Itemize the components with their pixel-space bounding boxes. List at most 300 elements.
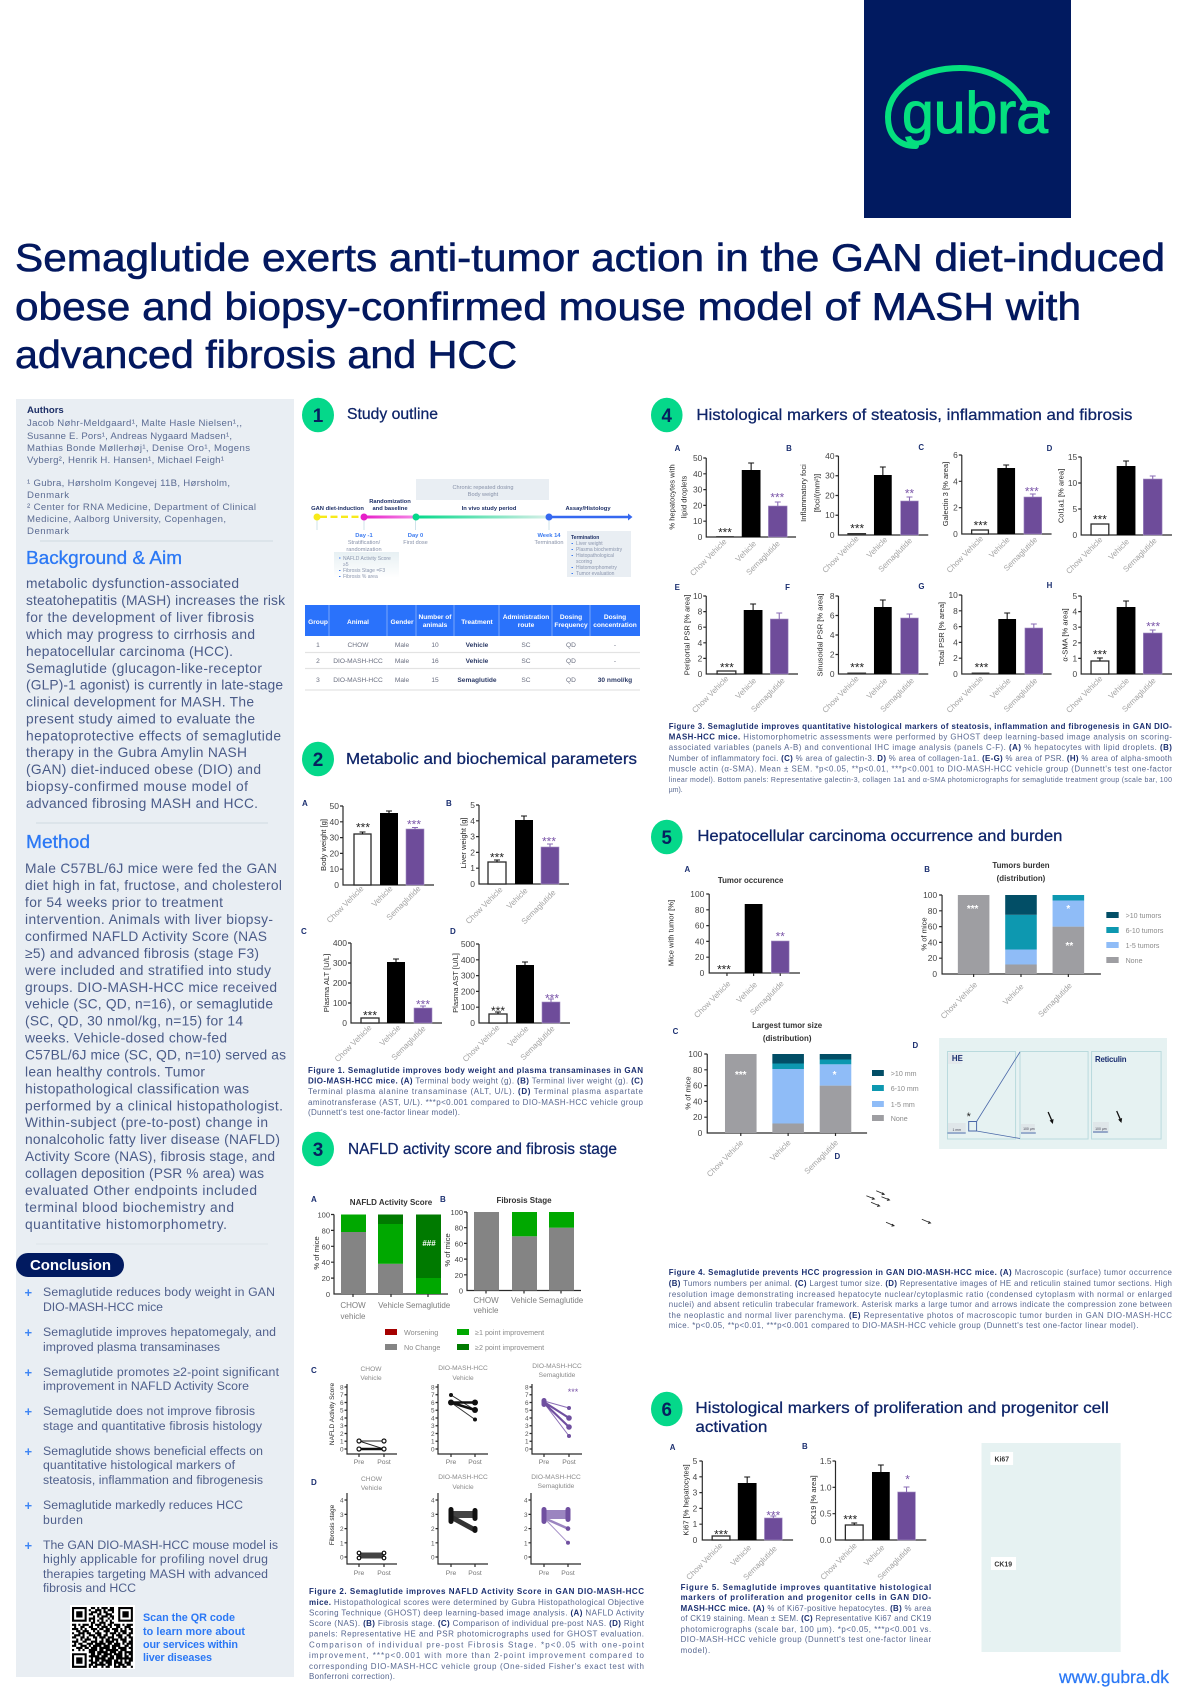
study table: Administration (503, 614, 549, 621)
image panel: HE and reticulin: * (967, 1111, 972, 1123)
bar chart: Ki67: A (670, 1443, 676, 1452)
bar chart: Ki67: 0 (693, 1535, 698, 1545)
bar chart: CK19: * (905, 1472, 910, 1487)
bar chart: CK19: Vehicle (862, 1543, 887, 1568)
line chart: NAS semaglutide: Post (562, 1459, 576, 1466)
timeline: Tumor evaluation (576, 571, 615, 577)
image panel: HE and reticulin: HE (952, 1054, 963, 1063)
line chart: fibrosis semaglutide: 4 (524, 1498, 528, 1504)
bar chart: plasma ALT: Semaglutide (390, 1024, 428, 1062)
study table: 10 (431, 642, 439, 649)
line chart: NAS chow vehicle: 6 (340, 1400, 344, 1407)
line chart: NAS semaglutide: 8 (525, 1384, 529, 1392)
bar chart: CK19: 0.0 (820, 1535, 832, 1545)
stacked bars: NAFLD activity score: 60 (322, 1242, 330, 1251)
bar chart: plasma AST: 0 (470, 1018, 475, 1028)
badge 5 (651, 820, 683, 854)
bar chart: sinusoidal PSR (785, 583, 928, 715)
line chart: fibrosis chow vehicle: 4 (340, 1498, 344, 1504)
stacked bars: NAFLD activity score: Vehicle (378, 1301, 404, 1310)
bar chart: plasma AST: 500 (461, 939, 475, 949)
stacked bars: fibrosis stage: vehicle (474, 1306, 499, 1315)
bar chart: tumor occurrence: 20 (695, 952, 705, 962)
conclusion bullets: + (24, 1285, 32, 1300)
QR caption (143, 1612, 245, 1664)
text block: background (25, 576, 285, 811)
image panel: HE and reticulin: 100 µm (1023, 1127, 1035, 1131)
bar chart: Col1a1: *** (1093, 512, 1107, 527)
study table: Frequency (554, 622, 588, 629)
bar chart: total PSR: Semaglutide (1002, 676, 1040, 714)
line chart: fibrosis DIO-MASH-HCC vehicle: Vehicle (452, 1484, 474, 1491)
caption: figure 5 (681, 1583, 932, 1655)
legend: NAS change: ≥2 point improvement (475, 1343, 544, 1352)
bar chart: body weight: *** (356, 820, 370, 834)
bar chart: periportal PSR: E (675, 583, 680, 592)
bar chart: alpha-SMA: H (1047, 581, 1053, 590)
bar chart: alpha-SMA: 2 (1073, 638, 1078, 648)
text block: method: (SC, QD, 30 nmol/kg, n=15) for 14 (25, 1014, 243, 1028)
timeline: scoring (576, 559, 592, 565)
conclusion bullets: + (24, 1444, 32, 1459)
image panel: HE and reticulin: 1 mm (953, 1128, 961, 1132)
image panel: HE and reticulin (912, 1038, 1167, 1149)
line chart: fibrosis DIO-MASH-HCC vehicle: 3 (431, 1512, 435, 1519)
authors: Medicine, Aalborg University, Copenhagen, (27, 514, 226, 525)
stacked bars: fibrosis stage: % of mice (443, 1233, 452, 1267)
heading: NAFLD: NAFLD activity score and fibrosis stage (348, 1141, 617, 1158)
stacked bars: NAFLD activity score: ### (422, 1239, 436, 1248)
conclusion bullets: burden (43, 1513, 83, 1527)
bar chart: liver weight: 0 (470, 879, 475, 889)
heading: method: Method (26, 832, 90, 852)
text block: method: performed by a clinical histopathologist. (25, 1098, 283, 1113)
bar chart: alpha-SMA: 5 (1073, 591, 1078, 601)
line chart: NAS DIO-MASH-HCC vehicle: 5 (431, 1408, 435, 1415)
bar chart: galectin 3: 0 (953, 529, 958, 539)
bar chart: inflammatory foci: 30 (825, 471, 835, 481)
QR caption: Scan the QR code (143, 1612, 235, 1624)
bar chart: body weight: 10 (330, 864, 339, 874)
study table: SC (521, 677, 531, 684)
conclusion bullets: therapies targeting MASH with advanced (43, 1567, 268, 1581)
study table: Male (395, 658, 409, 665)
caption: figure 4: resolution image demonstrating increased hepatocyte nuclear/cytoplasmic ratio (condensed cytoplasm with normal or enlarged (669, 1290, 1172, 1299)
legend: tumors: 1-5 tumors (1126, 942, 1160, 950)
bar chart: plasma ALT: 200 (333, 978, 347, 988)
badge 1: 1 (313, 406, 324, 427)
bar chart: total PSR (918, 582, 1052, 715)
bar chart: tumor occurrence: Mice with tumor [%] (667, 900, 676, 966)
line chart: NAS semaglutide: 5 (525, 1408, 529, 1415)
conclusion bullets: highly applicable for profiling novel drug (43, 1552, 268, 1566)
line chart: NAS DIO-MASH-HCC vehicle: 4 (431, 1416, 435, 1422)
bar chart: plasma ALT: 400 (333, 938, 347, 948)
authors: Denmark (27, 526, 69, 537)
image panel: Ki67 and CK19: CK19 (994, 1561, 1012, 1569)
line chart: fibrosis semaglutide: DIO-MASH-HCC (531, 1474, 581, 1481)
text block: method: Within-subject (pre-to-post) change in (25, 1115, 268, 1130)
bar chart: hepatocytes with lipid droplets: *** (718, 525, 732, 540)
bar chart: body weight: Vehicle (370, 884, 395, 909)
line chart: fibrosis chow vehicle: Pre (354, 1570, 365, 1577)
line chart: fibrosis chow vehicle: Fibrosis stage (329, 1504, 336, 1545)
conclusion bullets: + (24, 1404, 32, 1419)
bar chart: liver weight: B (446, 799, 452, 808)
bar chart: total PSR: G (918, 582, 925, 591)
timeline: Termination (571, 535, 599, 541)
legend: NAS change: No Change (404, 1343, 440, 1352)
bar chart: tumor occurrence (667, 865, 800, 1020)
line chart: fibrosis chow vehicle: 2 (340, 1526, 344, 1533)
timeline: Liver weight (576, 541, 603, 547)
legend: tumor size: 6-10 mm (891, 1085, 919, 1093)
caption: figure 5: Figure 5. Semaglutide improves quantitative histological (681, 1583, 931, 1592)
legend: tumor size: >10 mm (891, 1070, 917, 1078)
text block: method: ≥5) and advanced fibrosis (stage F3) (25, 946, 259, 961)
bar chart: plasma AST: 200 (461, 986, 475, 996)
stacked bars: largest tumor size: 40 (693, 1096, 703, 1106)
bar chart: sinusoidal PSR: Semaglutide (879, 676, 916, 714)
caption: figure 5: of CK19 staining. Mean ± SEM. (C) Representative Ki67 and CK19 (681, 1614, 932, 1623)
caption: figure 4: Figure 4. Semaglutide prevents HCC progression in GAN DIO-MASH-HCC mice. (A) Macroscopic (surface) tumor occurrence (669, 1268, 1173, 1277)
bar chart: body weight: 30 (330, 833, 339, 843)
study table: Dosing (604, 614, 626, 621)
study table: concentration (593, 622, 637, 629)
stacked bars: largest tumor size: (distribution) (763, 1034, 812, 1043)
bar chart: alpha-SMA: 3 (1073, 622, 1078, 632)
line chart: NAS DIO-MASH-HCC vehicle: 6 (431, 1400, 435, 1407)
caption: figure 3: linear model). Bottom panels: Representative galectin-3, collagen 1a1 and α-SMA photomicrographs for semaglutide treatment group (scale bar, 100 (669, 777, 1172, 784)
logo: gubra: gubra (902, 81, 1049, 146)
bar chart: liver weight: 2 (470, 847, 475, 857)
bar chart: Ki67 (670, 1443, 793, 1582)
bar chart: total PSR: 10 (949, 590, 958, 600)
conclusion bullets: Semaglutide markedly reduces HCC (43, 1498, 243, 1512)
bar chart: total PSR: Total PSR [% area] (937, 602, 946, 666)
bar chart: body weight (302, 799, 434, 925)
bar chart: total PSR: Vehicle (988, 676, 1013, 701)
bar chart: hepatocytes with lipid droplets: % hepatocytes with (668, 464, 677, 530)
panel: sidebar (16, 399, 294, 1677)
heading: proliferation: Histological markers of proliferation and progenitor cell (695, 1400, 1109, 1417)
bar chart: inflammatory foci: 40 (825, 451, 835, 461)
study table: DIO-MASH-HCC (333, 658, 383, 665)
bar chart: body weight: Body weight [g] (319, 819, 328, 871)
text block: background: Semaglutide (glucagon-like-receptor (26, 661, 262, 676)
study table: 16 (431, 658, 439, 665)
bar chart: plasma AST: D (450, 927, 456, 936)
heading: proliferation (695, 1400, 1109, 1436)
bar chart: body weight: *** (407, 818, 421, 832)
line chart: NAS DIO-MASH-HCC vehicle: 2 (431, 1431, 435, 1438)
study table: animals (423, 622, 448, 629)
conclusion bullets: improved plasma transaminases (43, 1340, 220, 1354)
line chart: fibrosis chow vehicle (311, 1476, 397, 1577)
bar chart: total PSR: 8 (953, 606, 958, 616)
stacked bars: tumors burden: *** (967, 904, 979, 915)
bar chart: hepatocytes with lipid droplets: 40 (693, 469, 703, 479)
title (15, 237, 1165, 377)
line chart: fibrosis semaglutide: 3 (524, 1512, 528, 1519)
stacked bars: tumors burden: 0 (932, 969, 937, 979)
study table: 3 (316, 677, 320, 684)
bar chart: Ki67: *** (766, 1508, 781, 1523)
line chart: NAS chow vehicle: Vehicle (360, 1375, 382, 1382)
legend: NAS change (385, 1328, 544, 1352)
timeline: First dose (403, 540, 428, 546)
line chart: NAS semaglutide: Semaglutide (539, 1372, 576, 1379)
stacked bars: NAFLD activity score: 80 (322, 1226, 330, 1235)
legend: NAS change: Worsening (404, 1328, 438, 1337)
bar chart: plasma AST: Chow Vehicle (461, 1023, 502, 1064)
line chart: NAS DIO-MASH-HCC vehicle: DIO-MASH-HCC (438, 1365, 488, 1372)
line chart: NAS semaglutide: *** (568, 1387, 579, 1397)
panel: 1 study outline (302, 398, 640, 690)
bar chart: periportal PSR: Chow Vehicle (690, 674, 731, 715)
bar chart: sinusoidal PSR: Vehicle (865, 676, 890, 701)
heading: study outline: Study outline (347, 406, 438, 423)
conclusion bullets: + (24, 1498, 32, 1513)
stacked bars: NAFLD activity score: 0 (326, 1290, 330, 1299)
title: obese and biopsy-confirmed mouse model of MASH with (15, 286, 1081, 329)
line chart: fibrosis semaglutide: 1 (524, 1540, 528, 1547)
bar chart: CK19 (802, 1442, 926, 1582)
caption: figure 2: Figure 2. Semaglutide improves NAFLD Activity Score in GAN DIO-MASH-HCC (309, 1587, 644, 1596)
legend: tumors: None (1126, 957, 1143, 965)
stacked bars: tumors burden: % of mice (919, 917, 928, 951)
caption: figure 2: corresponding DIO-MASH-HCC vehicle group (One-sided Fisher's exact test with (309, 1662, 644, 1671)
text block: method: diet high in fat, fructose, and cholesterol (25, 878, 282, 893)
bar chart: inflammatory foci (786, 444, 928, 575)
caption: figure 1: Terminal plasma alanine transaminase (ALT, U/L). (D) Terminal plasma aspartate (308, 1087, 644, 1096)
bar chart: Ki67: 5 (693, 1456, 698, 1466)
line chart: NAS chow vehicle: 4 (340, 1416, 344, 1422)
title: Semaglutide exerts anti-tumor action in the GAN diet-induced (15, 237, 1165, 280)
line chart: NAS semaglutide: 6 (525, 1400, 529, 1407)
timeline: and baseline (372, 506, 408, 512)
line chart: fibrosis chow vehicle: CHOW (361, 1476, 383, 1483)
stacked bars: tumors burden: (distribution) (997, 874, 1046, 883)
line chart: NAS DIO-MASH-HCC vehicle (431, 1365, 488, 1466)
bar chart: alpha-SMA: Chow Vehicle (1064, 674, 1105, 715)
bar chart: inflammatory foci: [foci/(mm²)] (813, 474, 822, 512)
caption: figure 2: mice. Histopathological scores were determined by Gubra Histopathological Objective (309, 1598, 645, 1607)
panel: 5 hepatocellular carcinoma (651, 820, 1173, 1330)
authors: ¹ Gubra, Hørsholm Kongevej 11B, Hørsholm, (27, 478, 230, 489)
caption: figure 5: DIO-MASH-HCC vehicle group (Dunnett's test one-factor linear (681, 1635, 932, 1644)
text block: method: nonalcoholic fatty liver disease (NAFLD) (25, 1132, 280, 1147)
bar chart: Col1a1: Vehicle (1107, 537, 1131, 562)
text block: method: Activity Score (NAS), fibrosis stage, and (25, 1149, 275, 1164)
line chart: NAS semaglutide: DIO-MASH-HCC (532, 1363, 582, 1370)
text block: background: hepatocellular carcinoma (HCC). (26, 644, 233, 659)
line chart: NAS semaglutide: Pre (539, 1459, 550, 1466)
bar chart: plasma ALT: Chow Vehicle (333, 1023, 374, 1064)
bar chart: periportal PSR: 6 (698, 622, 703, 632)
heading: hepatocellular carcinoma: Hepatocellular carcinoma occurrence and burden (697, 828, 1062, 845)
legend: tumor size: None (891, 1115, 908, 1123)
image panel: HE and reticulin: D (912, 1041, 918, 1050)
stacked bars: fibrosis stage: Vehicle (511, 1296, 537, 1305)
stacked bars: largest tumor size: Semaglutide (803, 1138, 840, 1176)
text block: method (24, 861, 286, 1232)
bar chart: tumor occurrence: Semaglutide (748, 979, 786, 1017)
bar chart: CK19: CK19 [% area] (809, 1475, 818, 1525)
timeline: Day -1 (355, 533, 373, 539)
line chart: NAS chow vehicle: 5 (340, 1408, 344, 1415)
bar chart: periportal PSR: Semaglutide (749, 676, 787, 714)
legend: NAS change: ≥1 point improvement (475, 1328, 544, 1337)
panel: 3 NAFLD activity score and fibrosis stage (302, 1132, 645, 1681)
bar chart: Ki67: Semaglutide (741, 1544, 779, 1582)
study table: 15 (431, 677, 439, 684)
stacked bars: NAFLD activity score: 20 (322, 1274, 330, 1283)
bar chart: plasma AST: Semaglutide (519, 1024, 557, 1062)
line chart: fibrosis semaglutide: 0 (524, 1554, 528, 1562)
icon: small arrows (866, 1191, 931, 1226)
bar chart: tumor occurrence: 40 (695, 936, 705, 946)
text block: background: metabolic dysfunction-associated (26, 576, 239, 591)
heading: histological markers: Histological markers of steatosis, inflammation and fibrosis (696, 407, 1133, 424)
bar chart: tumor occurrence: Vehicle (735, 980, 759, 1005)
stacked bars: NAFLD activity score: Semaglutide (406, 1301, 451, 1310)
conclusion bullets: quantitative histological markers of (43, 1458, 236, 1472)
conclusion bullets: Semaglutide shows beneficial effects on (43, 1444, 263, 1458)
badge 3: 3 (313, 1140, 323, 1161)
bar chart: alpha-SMA: Vehicle (1107, 676, 1131, 701)
badge 5: 5 (662, 827, 672, 848)
stacked bars: tumors burden (919, 861, 1101, 1021)
bar chart: inflammatory foci: Semaglutide (877, 536, 914, 574)
study table: - (614, 658, 616, 665)
bar chart: CK19: Semaglutide (876, 1544, 913, 1582)
stacked bars: tumors burden: ** (1065, 941, 1073, 952)
caption: figure 1: DIO-MASH-HCC mice. (A) Terminal body weight (g). (B) Terminal liver weight (g). (C) (308, 1076, 643, 1086)
bar chart: Ki67: Vehicle (729, 1543, 754, 1568)
text block: method: terminal blood biochemistry and (25, 1200, 234, 1215)
bar chart: plasma AST: 300 (461, 971, 475, 981)
bar chart: hepatocytes with lipid droplets: 0 (698, 532, 703, 542)
study table: DIO-MASH-HCC (333, 677, 383, 684)
bar chart: Ki67: Ki67 [% hepatocytes] (682, 1464, 690, 1536)
line chart: NAS chow vehicle: 3 (340, 1423, 344, 1430)
bar chart: sinusoidal PSR: Chow Vehicle (821, 674, 861, 715)
line chart: NAS chow vehicle: 7 (340, 1392, 344, 1399)
text block: method: vehicle (SC, QD, n=16), or semaglutide (25, 997, 273, 1012)
text block: background: advanced fibrosing MASH and HCC. (26, 796, 258, 811)
bar chart: Ki67: 1 (693, 1519, 698, 1529)
bar chart: hepatocytes with lipid droplets: *** (770, 490, 785, 505)
text block: method: collagen deposition (PSR % area) was (25, 1166, 264, 1181)
stacked bars: fibrosis stage: 0 (459, 1286, 463, 1296)
bar chart: alpha-SMA: Semaglutide (1120, 676, 1158, 714)
timeline: Week 14 (537, 533, 561, 539)
bar chart: plasma AST: *** (491, 1004, 505, 1018)
bar chart: galectin 3: 4 (953, 476, 958, 486)
study table (305, 605, 640, 690)
bar chart: body weight: 40 (330, 817, 339, 827)
study table: Vehicle (466, 642, 489, 649)
line chart: fibrosis DIO-MASH-HCC vehicle: 0 (431, 1554, 435, 1562)
bar chart: hepatocytes with lipid droplets: Semaglutide (744, 539, 782, 577)
study table: Male (395, 677, 409, 684)
conclusion bullets: fibrosis and HCC (43, 1581, 136, 1595)
bar chart: Col1a1: Col1a1 [% area] (1056, 469, 1065, 523)
stacked bars: tumors burden: B (924, 865, 930, 874)
badge 1 (302, 398, 334, 432)
stacked bars: fibrosis stage: 100 (450, 1208, 463, 1217)
line chart: NAS chow vehicle (311, 1366, 397, 1466)
study table: 30 nmol/kg (598, 677, 632, 684)
timeline: Day 0 (408, 533, 423, 539)
line chart: fibrosis DIO-MASH-HCC vehicle: DIO-MASH-HCC (438, 1474, 488, 1481)
authors: Mathias Bonde Møllerhøj¹, Denise Oro¹, Mogens (27, 443, 250, 454)
bar chart: liver weight: 5 (470, 800, 475, 810)
stacked bars: tumors burden: 40 (928, 937, 937, 947)
bar chart: hepatocytes with lipid droplets: lipid droplets (680, 475, 688, 518)
authors: Jacob Nøhr-Meldgaard¹, Malte Hasle Nielsen¹,, (27, 418, 242, 429)
conclusion bullets: Semaglutide improves hepatomegaly, and (43, 1325, 276, 1339)
QR caption: liver diseases (143, 1652, 212, 1664)
line chart: NAS semaglutide (525, 1363, 582, 1466)
badge 2 (302, 742, 334, 776)
bar chart: alpha-SMA: α-SMA [% area] (1060, 608, 1069, 662)
bar chart: total PSR: 4 (953, 637, 958, 647)
caption: figure 1: Figure 1. Semaglutide improves body weight and plasma transaminases in GAN (308, 1066, 643, 1075)
study table: 1 (316, 642, 320, 649)
stacked bars: largest tumor size: Chow Vehicle (705, 1138, 746, 1179)
caption: figure 3: µm). (669, 787, 683, 794)
line chart: NAS chow vehicle: CHOW (361, 1366, 382, 1373)
line chart: fibrosis chow vehicle: 1 (340, 1540, 344, 1547)
stacked bars: largest tumor size: 20 (693, 1112, 703, 1122)
stacked bars: tumors burden: Semaglutide (1036, 981, 1074, 1019)
caption: figure 4: nuclei) and absent reticulin trabecular framework. Asterisk marks a large tumor and arrows indicate the compression zone between (669, 1300, 1172, 1309)
line chart: NAS DIO-MASH-HCC vehicle: Post (468, 1459, 482, 1466)
line chart: fibrosis DIO-MASH-HCC vehicle: 1 (431, 1540, 435, 1547)
line chart: fibrosis DIO-MASH-HCC vehicle: 4 (431, 1498, 435, 1504)
bar chart: CK19: 0.5 (820, 1509, 832, 1519)
bar chart: plasma ALT: Plasma ALT [U/L] (322, 954, 331, 1012)
bar chart: hepatocytes with lipid droplets: 30 (693, 485, 703, 495)
bar chart: tumor occurrence: 100 (690, 889, 705, 899)
stacked bars: fibrosis stage: Fibrosis Stage (496, 1196, 552, 1205)
bar chart: plasma ALT: 0 (342, 1018, 347, 1028)
line chart: fibrosis semaglutide (524, 1474, 581, 1577)
line chart: fibrosis chow vehicle: 3 (340, 1512, 344, 1519)
conclusion bullets: improvement in NAFLD Activity Score (43, 1379, 249, 1393)
stacked bars: largest tumor size: * (833, 1070, 837, 1081)
bar chart: plasma AST: Vehicle (506, 1024, 531, 1049)
bar chart: Ki67: 4 (693, 1472, 698, 1482)
study table: QD (566, 677, 576, 684)
heading: conclusion pill (16, 1253, 124, 1277)
bar chart: liver weight: 4 (470, 816, 475, 826)
text block: method: weeks. Vehicle-dosed chow-fed (24, 1030, 227, 1046)
stacked bars: tumors burden: 100 (923, 890, 937, 900)
bar chart: Col1a1: D (1047, 444, 1053, 453)
text block: background: which may progress to cirrhosis and (25, 627, 255, 642)
caption: figure 3: MASH-HCC mice. Histomorphometric assessments were performed by GHOST deep learning-based image analysis on scoring- (669, 732, 1172, 742)
bar chart: galectin 3: *** (1025, 484, 1039, 499)
line chart: fibrosis chow vehicle: Vehicle (361, 1485, 382, 1492)
study table: Treatment (461, 619, 494, 626)
study table: Semaglutide (457, 677, 497, 684)
line chart: NAS semaglutide: 1 (525, 1439, 529, 1446)
text block: background: present study aimed to evaluate the (26, 711, 255, 726)
line chart: fibrosis DIO-MASH-HCC vehicle: Pre (446, 1570, 457, 1577)
